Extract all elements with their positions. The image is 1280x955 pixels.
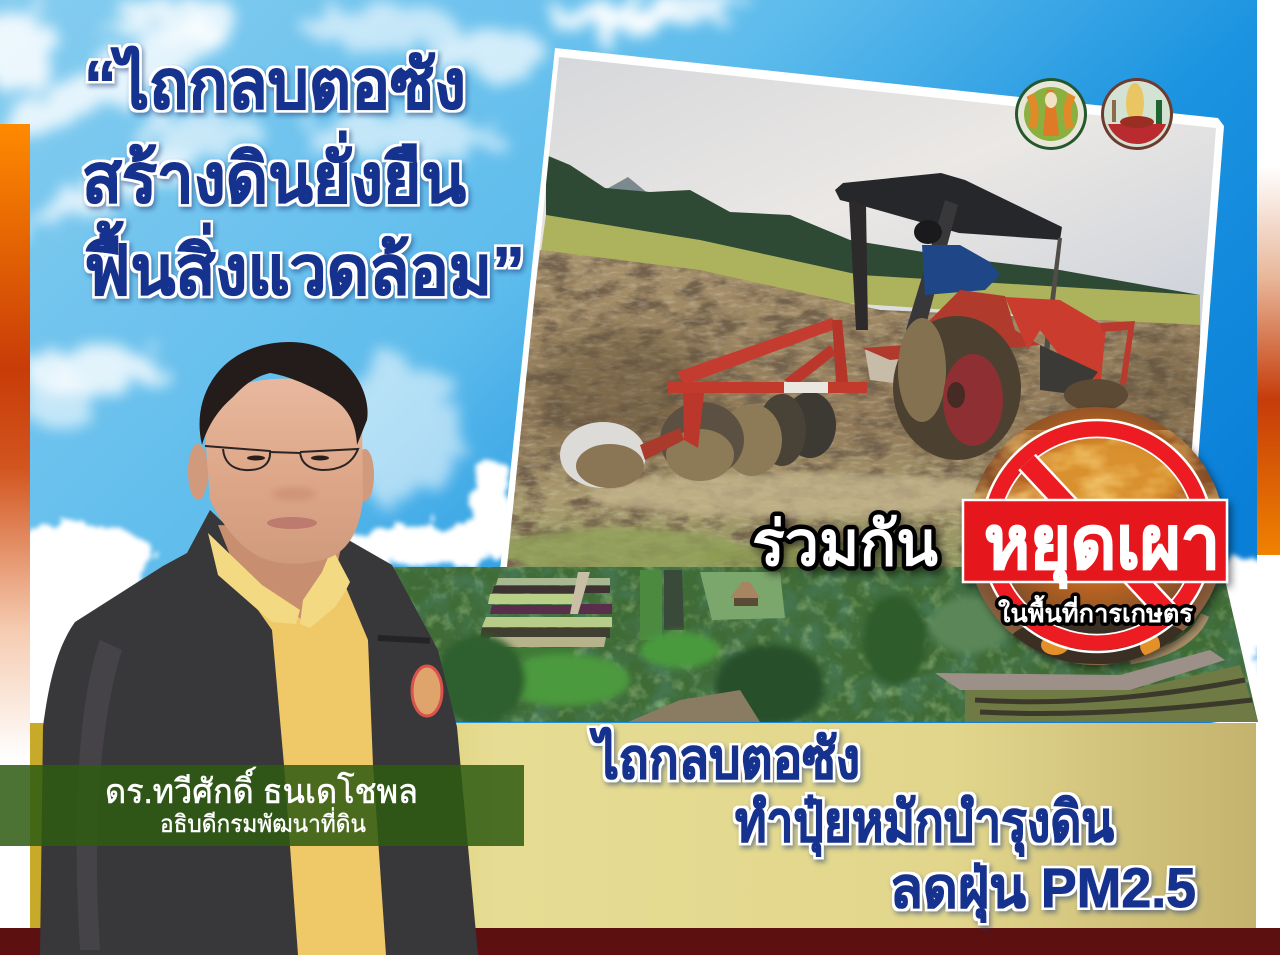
left decorative strip	[0, 124, 30, 939]
garden shelter	[700, 572, 785, 620]
nose	[272, 487, 316, 501]
fire photo circle	[967, 407, 1225, 665]
logo: Ministry of Agriculture seal	[1015, 78, 1087, 150]
logo: Land Development Department seal	[1101, 78, 1173, 150]
ears	[188, 444, 208, 500]
title: ฟื้นสิ่งแวดล้อม”	[84, 220, 525, 309]
yellow shirt	[230, 570, 386, 955]
stop burning badge	[963, 407, 1227, 665]
photo sky	[500, 50, 1230, 350]
right decorative strip	[1257, 0, 1280, 555]
portrait: Director General	[40, 342, 478, 955]
panel: cream bottom band	[30, 723, 1256, 929]
red banner	[963, 500, 1227, 582]
name banner	[0, 765, 524, 846]
panel: garden aerial photo	[390, 560, 1270, 725]
hair	[200, 342, 368, 445]
banner subtitle: ในพื้นที่การเกษตร	[998, 594, 1194, 628]
road and terraces	[935, 615, 1258, 722]
mouth	[267, 517, 317, 529]
disc plough	[560, 318, 867, 488]
together label: ร่วมกัน	[752, 510, 938, 579]
name: ดร.ทวีศักดิ์ ธนเดโชพล	[105, 766, 418, 811]
prohibition ring	[981, 420, 1213, 652]
garden plot rows	[480, 570, 684, 658]
title: “ไถกลบตอซัง	[84, 45, 466, 123]
face	[204, 379, 363, 564]
dark red footer	[0, 928, 1280, 955]
panel: tractor photo	[500, 48, 1230, 572]
rear wheel	[893, 316, 1021, 460]
bottom headline: ทำปุ๋ยหมักบำรุงดิน	[735, 790, 1114, 857]
straw foreground	[500, 473, 1010, 572]
tractor	[835, 173, 1135, 460]
glasses	[205, 446, 358, 470]
bottom headline: ลดฝุ่น PM2.5	[890, 856, 1196, 923]
jacket badge	[412, 666, 442, 716]
left collar	[208, 533, 300, 624]
bottom headline	[590, 726, 1196, 923]
banana and trees	[435, 595, 1010, 725]
ploughed soil and straw	[500, 250, 1200, 570]
title	[82, 45, 525, 309]
pond	[628, 690, 760, 722]
jacket sleeve shading	[77, 640, 122, 950]
job title: อธิบดีกรมพัฒนาที่ดิน	[160, 807, 366, 838]
jacket	[40, 510, 478, 955]
bottom headline: ไถกลบตอซัง	[590, 726, 860, 790]
neck	[218, 525, 345, 622]
distant tree line	[546, 156, 1200, 295]
banner headline: หยุดเผา	[984, 501, 1220, 589]
green paddy field	[540, 215, 1200, 335]
eyes	[247, 456, 329, 460]
right collar	[300, 548, 350, 628]
jacket pocket	[378, 635, 430, 644]
title: สร้างดินยั่งยืน	[82, 130, 466, 217]
